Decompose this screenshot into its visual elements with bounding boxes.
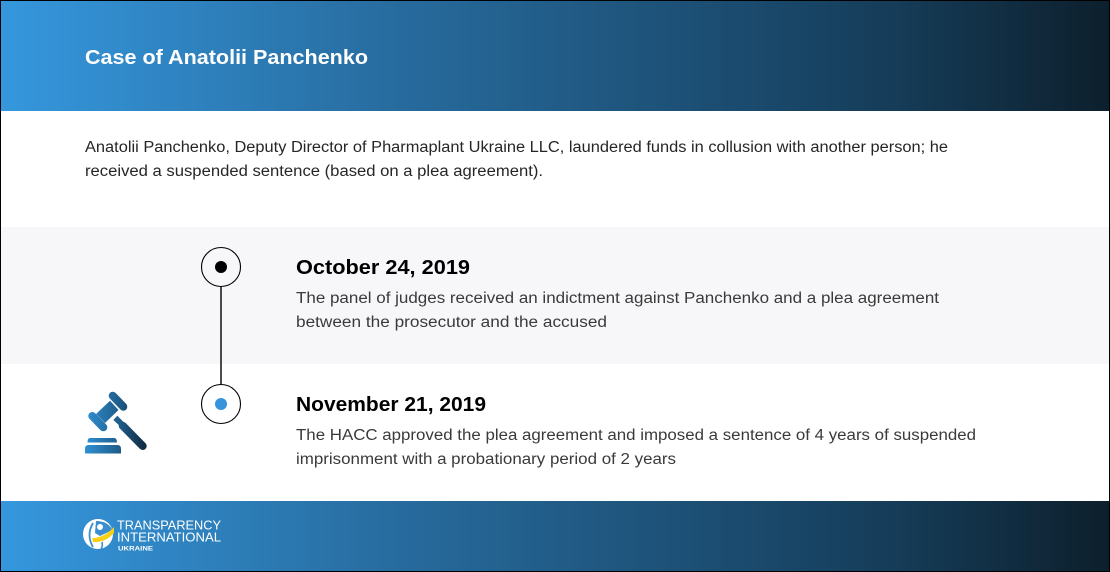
- header banner: [1, 1, 1109, 111]
- marker: November 21: [202, 384, 240, 424]
- logo emblem: [83, 519, 114, 549]
- timeline: [202, 248, 240, 424]
- logo wordmark: UKRAINE: [118, 546, 154, 552]
- logo wordmark: [117, 518, 221, 552]
- event date: October 24, 2019: [296, 256, 470, 279]
- logo: Transparency International Ukraine: [83, 518, 221, 552]
- intro text block: received a suspended sentence (based on a plea agreement).: [85, 163, 543, 180]
- event date: November 21, 2019: [296, 393, 486, 416]
- connector line: [220, 286, 222, 385]
- intro text block: Anatolii Panchenko, Deputy Director of Pharmaplant Ukraine LLC, laundered funds in collusion with another person; he: [85, 139, 948, 156]
- intro text block: [85, 139, 948, 180]
- event description: imprisonment with a probationary period of 2 years: [296, 451, 676, 468]
- event description: [296, 427, 976, 468]
- logo wordmark: TRANSPARENCY: [117, 518, 221, 532]
- event: October 24, 2019: [296, 256, 940, 331]
- event description: The HACC approved the plea agreement and imposed a sentence of 4 years of suspended: [296, 427, 976, 444]
- event description: between the prosecutor and the accused: [296, 314, 607, 331]
- icon: gavel: [85, 396, 143, 454]
- logo wordmark: INTERNATIONAL: [117, 530, 221, 544]
- event description: [296, 290, 940, 331]
- marker: October 24: [202, 248, 240, 286]
- event description: The panel of judges received an indictment against Panchenko and a plea agreement: [296, 290, 940, 307]
- footer banner: [1, 501, 1109, 571]
- panel: October 24 band: [1, 227, 1109, 364]
- title: Case of Anatolii Panchenko: [85, 47, 368, 69]
- event: November 21, 2019: [296, 393, 976, 468]
